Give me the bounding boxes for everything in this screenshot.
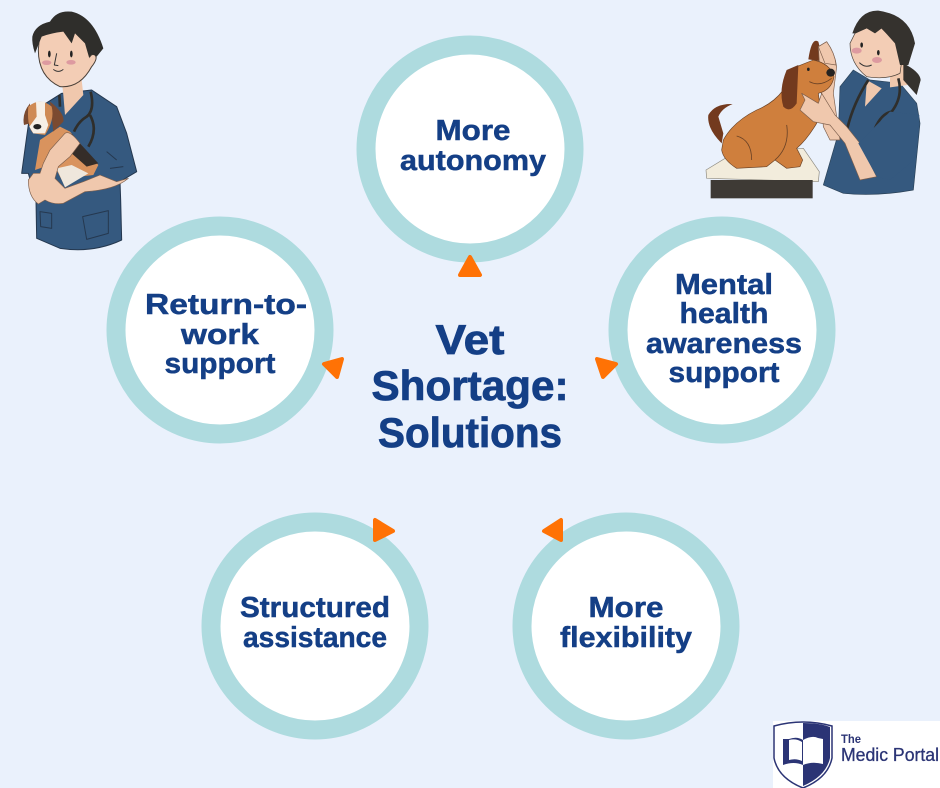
circle: More flexibility: More (588, 592, 664, 624)
logo: The Medic Portal (773, 721, 940, 788)
logo text (841, 732, 939, 765)
illustration: vet holding puppy (22, 11, 137, 250)
circle: Mental health awareness support: health (680, 298, 768, 330)
circle: Return-to-work support: Return-to- (145, 289, 307, 321)
arrow: to More flexibility (544, 520, 561, 540)
circle: More flexibility (522, 522, 730, 730)
circle: Structured assistance: assistance (243, 622, 387, 654)
circle: Mental health awareness support: awareness (646, 328, 802, 360)
illustration: vet examining dog on table (706, 11, 921, 198)
circle: Return-to-work support (116, 226, 324, 434)
circle: More flexibility: flexibility (560, 622, 692, 654)
arrow: to Mental health (597, 359, 616, 377)
circle: More autonomy (366, 45, 574, 253)
circle: Mental health awareness support (618, 226, 826, 434)
title: Solutions (378, 409, 562, 456)
circle: More autonomy: More (436, 115, 510, 147)
circle: Structured assistance: Structured (240, 592, 390, 624)
circle: Return-to-work support: support (164, 348, 276, 380)
logo text: Medic Portal (841, 745, 939, 765)
circle: More autonomy: autonomy (400, 145, 546, 177)
arrow: to Structured assistance (375, 520, 393, 540)
arrow: to More autonomy (460, 257, 480, 275)
title: Shortage: (372, 362, 568, 409)
logo text: The (841, 732, 861, 746)
circle: Mental health awareness support: Mental (675, 269, 773, 301)
circle: Mental health awareness support: support (668, 357, 780, 389)
circle: Structured assistance (211, 522, 419, 730)
circle: Return-to-work support: work (180, 319, 260, 351)
title: Vet (436, 316, 505, 363)
icon: shield with book (774, 722, 832, 788)
arrow: to Return-to-work (324, 359, 342, 377)
title (372, 316, 568, 456)
